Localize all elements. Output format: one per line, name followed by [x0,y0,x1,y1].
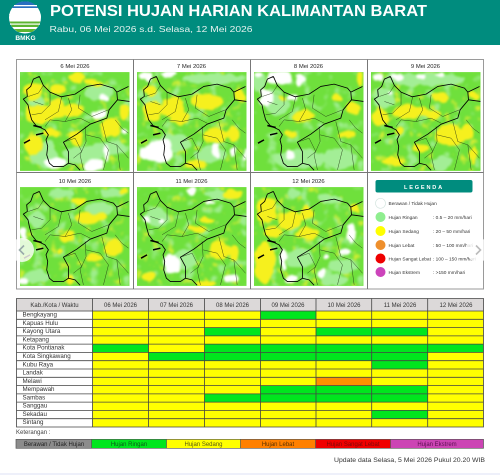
regency names: Kubu Raya [22,361,54,368]
legend entries: : 100 – 150 mm/hari [433,256,476,262]
icon: BMKG logo: BMKG [15,35,36,42]
map: 6 Mei 2026: 6 Mei 2026 [60,64,90,70]
legend heading: LEGENDA [404,185,444,191]
keterangan label: Keterangan : [16,430,51,436]
map: 11 Mei 2026: 11 Mei 2026 [176,179,208,185]
legend entries: Berawan / Tidak Hujan [388,201,437,207]
map: 10 Mei 2026: 10 Mei 2026 [59,179,92,185]
panel: legend [376,180,476,277]
regency names: Mempawah [22,386,55,393]
map: 7 Mei 2026 [137,64,248,171]
color key bar: Hujan Sedang [184,442,223,448]
map: 11 Mei 2026 [137,179,246,286]
table grid [16,298,484,427]
legend entries: : 20 – 50 mm/hari [433,229,470,235]
map: 8 Mei 2026: 8 Mei 2026 [294,64,324,70]
header banner [0,0,500,45]
table cells [92,311,484,427]
table header [16,298,484,312]
map: 6 Mei 2026 [20,64,130,171]
table header: 06 Mei 2026 [104,303,138,309]
icon: carousel next arrow [466,238,490,262]
table header: Kab./Kota / Waktu [30,303,79,309]
map: 10 Mei 2026 [20,179,129,286]
color key bar: Hujan Lebat [262,442,295,448]
map: 8 Mei 2026 [252,64,364,171]
regency names: Sambas [22,394,45,402]
table header: 08 Mei 2026 [216,303,250,309]
table header: 11 Mei 2026 [384,303,417,309]
color key bar: Hujan Sangat Lebat [326,442,380,448]
regency names: Melawi [22,378,42,385]
bottom strip [0,473,500,475]
update timestamp: Update data Selasa, 5 Mei 2026 Pukul 20.20 WIB [334,457,485,464]
map: 9 Mei 2026 [371,64,480,171]
map: 9 Mei 2026: 9 Mei 2026 [411,64,441,70]
legend entries: : 0.5 – 20 mm/hari [433,215,472,221]
legend entries [376,198,476,277]
legend entries: : >150 mm/hari [433,270,465,276]
color key bar: Hujan Ringan [111,442,147,448]
regency names: Kapuas Hulu [22,320,58,327]
legend entries: Hujan Lebat [388,243,415,249]
regency names: Kota Pontianak [22,345,65,352]
regency names: Bengkayang [22,312,57,319]
regency names: Sintang [22,419,44,426]
table header: 07 Mei 2026 [160,303,194,309]
regency names: Sekadau [22,411,47,418]
regency names: Kayong Utara [22,328,61,335]
legend entries: Hujan Sangat Lebat [388,256,432,262]
panel: map grid frame [16,60,484,289]
regency names: Ketapang [22,336,50,344]
legend entries: Hujan Ringan [388,215,418,221]
legend entries: Hujan Ekstrem [388,270,420,276]
table: daily rain forecast per regency [16,298,484,427]
regency names [22,312,71,426]
regency names: Kota Singkawang [22,353,71,360]
icon: BMKG logo [9,1,41,42]
regency names: Sanggau [22,403,48,410]
legend entries: Hujan Sedang [388,229,419,235]
subtitle: Rabu, 06 Mei 2026 s.d. Selasa, 12 Mei 2026 [50,24,253,34]
table header: 12 Mei 2026 [439,303,473,309]
color key bar [16,439,484,448]
map: 12 Mei 2026: 12 Mei 2026 [292,179,325,185]
regency names: Landak [22,370,44,377]
map: 12 Mei 2026 [254,179,364,286]
color key bar: Berawan / Tidak Hujan [24,442,84,448]
title: POTENSI HUJAN HARIAN KALIMANTAN BARAT [50,3,427,20]
table header: 09 Mei 2026 [271,303,305,309]
table header: 10 Mei 2026 [327,303,361,309]
legend entries: : 50 – 100 mm/hari [433,243,473,249]
color key bar: Hujan Ekstrem [417,442,457,448]
map: 7 Mei 2026: 7 Mei 2026 [177,64,207,70]
icon: carousel previous arrow [10,238,34,262]
